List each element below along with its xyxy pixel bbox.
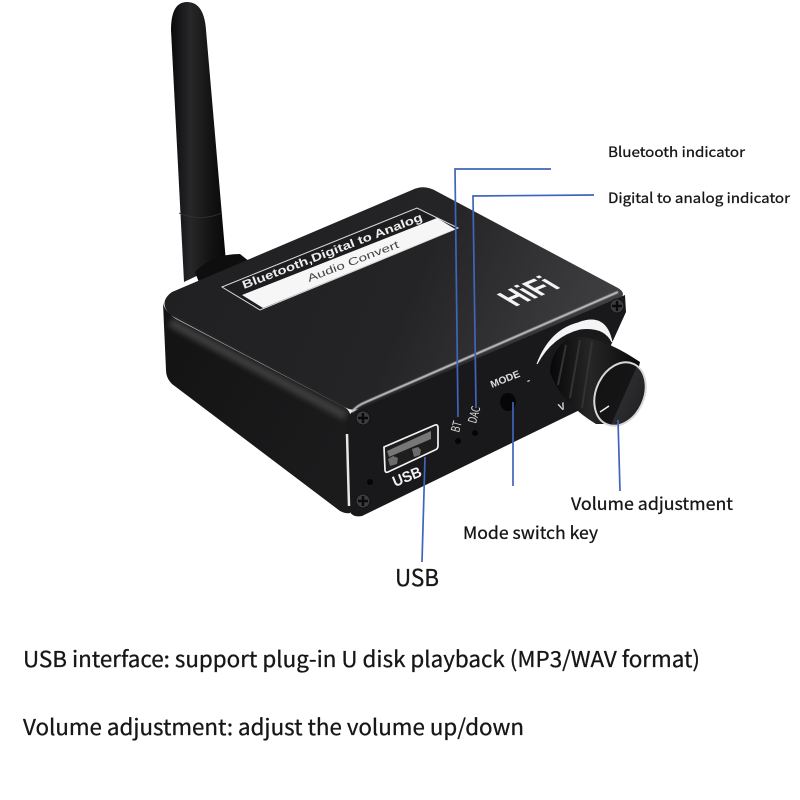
arrow: volume leader	[618, 420, 620, 491]
front panel markings: -	[525, 375, 532, 387]
front left highlight	[347, 434, 349, 506]
text: USB interface description: USB interface: support plug-in U disk playback (MP3/WAV format)	[23, 642, 700, 674]
front panel markings: MODE	[489, 369, 522, 391]
arrow: Bluetooth indicator leader	[455, 169, 551, 417]
panel: label plate: Audio Convert	[306, 239, 401, 285]
arrow: DAC indicator leader	[473, 195, 594, 408]
arrow: USB leader	[422, 457, 425, 562]
front panel markings: BT	[447, 419, 466, 434]
label: Mode switch key: Mode switch key	[463, 519, 598, 544]
arrow: mode leader	[512, 402, 514, 486]
front panel markings	[367, 369, 568, 485]
device body	[163, 187, 626, 516]
icon: antenna	[171, 2, 250, 285]
text: volume adjustment description: Volume adjustment: adjust the volume up/down	[23, 710, 524, 742]
panel: label plate: Bluetooth,Digital to Analog	[241, 212, 424, 292]
icon: USB port	[384, 425, 438, 491]
device top face	[164, 187, 623, 410]
front panel markings: DAC	[464, 404, 485, 425]
panel: label plate	[222, 208, 458, 310]
icon: screws	[356, 299, 624, 508]
icon: volume knob	[537, 320, 655, 434]
label: Bluetooth indicator: Bluetooth indicator	[608, 142, 746, 162]
label: Volume adjustment: Volume adjustment	[571, 490, 734, 515]
left side bevel highlight	[170, 322, 346, 416]
label: Digital to analog indicator: Digital to analog indicator	[608, 188, 791, 208]
label: USB: USB	[395, 559, 439, 593]
front panel markings: V	[557, 401, 568, 414]
icon: USB port: USB	[390, 464, 424, 491]
front highlight ridge	[352, 292, 618, 412]
icon: mode key	[500, 393, 516, 411]
device left side	[163, 303, 351, 513]
device front face	[347, 295, 626, 516]
brand: HiFi: HiFi	[489, 272, 569, 311]
